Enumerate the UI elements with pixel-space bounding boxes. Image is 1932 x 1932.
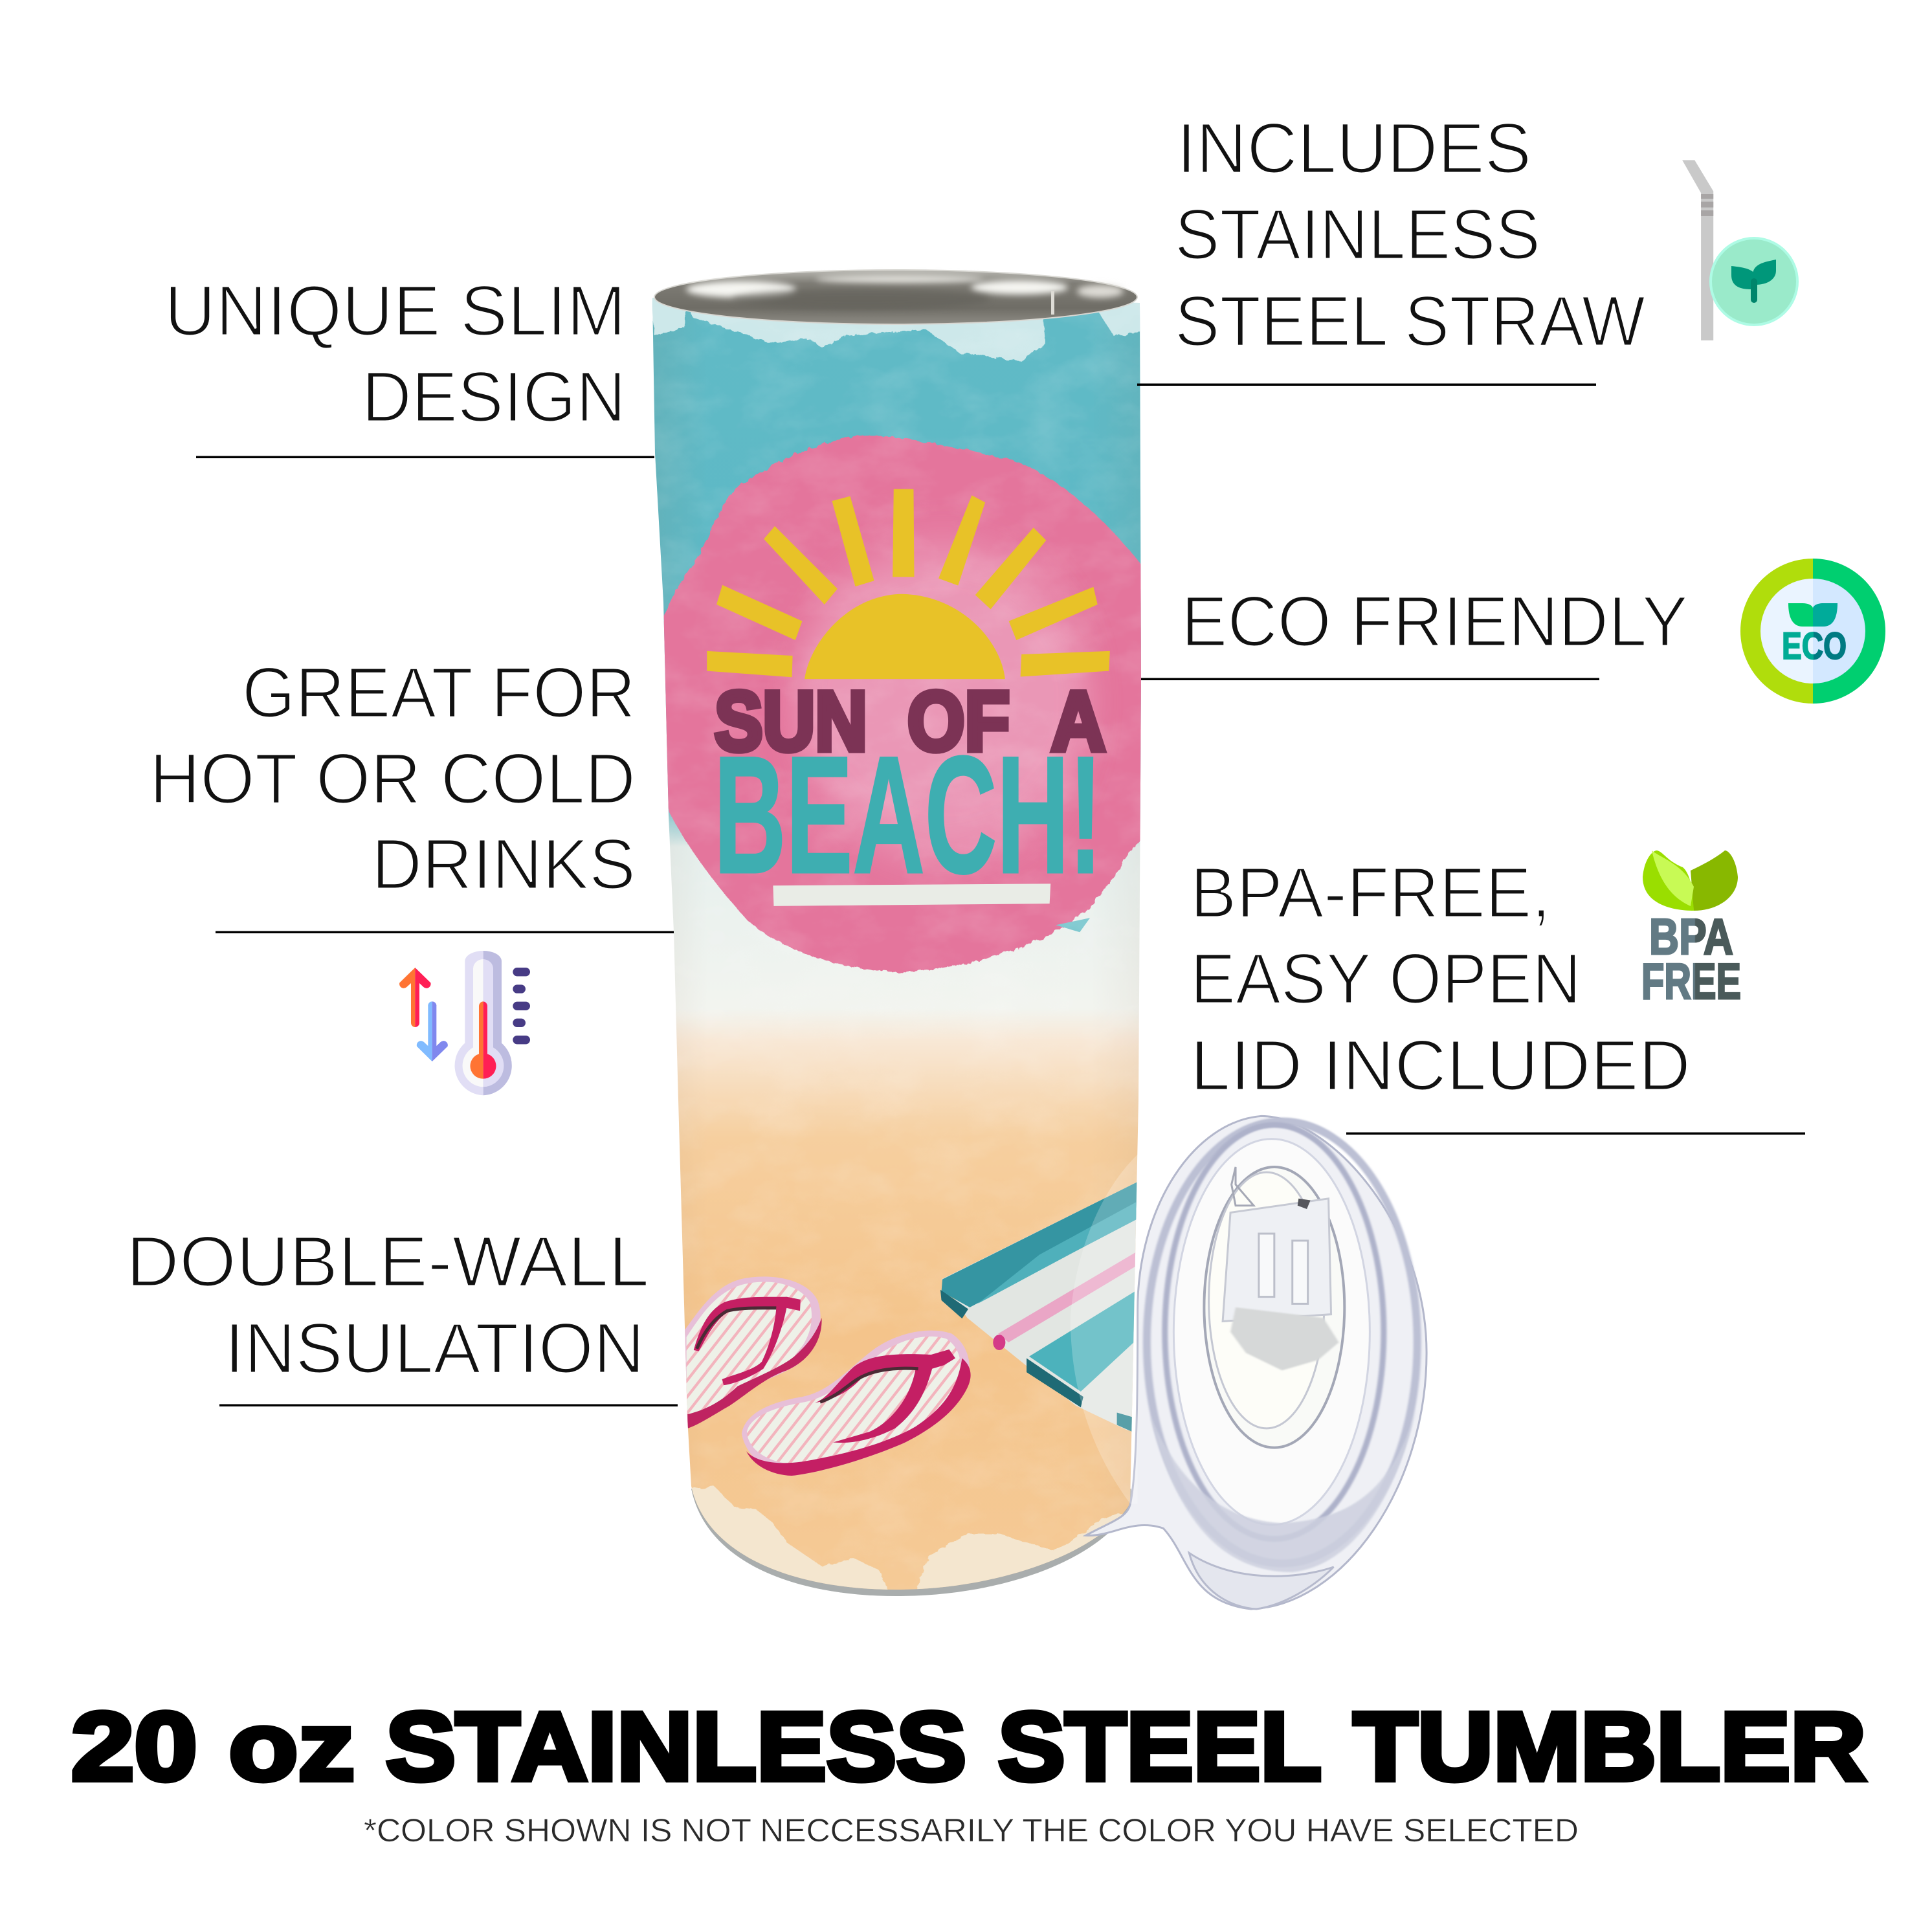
bottom clouds xyxy=(692,1485,1123,1590)
label text: INCLUDES xyxy=(1177,109,1531,188)
label text xyxy=(126,1222,649,1388)
title: TUMBLER xyxy=(1353,1692,1866,1801)
label text: DESIGN xyxy=(362,357,626,437)
icon: straw with sprout xyxy=(1682,160,1797,340)
flip-flop left xyxy=(683,1276,822,1428)
label text: GREAT FOR xyxy=(242,653,636,733)
icon: thermometer with arrows xyxy=(399,951,530,1095)
transparent lid xyxy=(1071,1116,1427,1609)
label text: EASY OPEN xyxy=(1190,939,1581,1019)
bpa text: BPA xyxy=(1649,908,1733,965)
watercolor mottling xyxy=(647,298,1152,1592)
tumbler rim xyxy=(654,270,1137,324)
leader line xyxy=(1141,678,1599,680)
feature: double-wall insulation xyxy=(126,1222,678,1406)
label text: STEEL STRAW xyxy=(1175,282,1645,361)
leader line xyxy=(196,456,654,458)
tumbler printed wrap xyxy=(647,285,1152,1599)
label text xyxy=(1190,853,1691,1105)
leader line xyxy=(216,931,674,933)
label text xyxy=(164,271,626,437)
eco text: ECO xyxy=(1782,625,1847,667)
sprout badge xyxy=(1711,238,1797,325)
footnote: *COLOR SHOWN IS NOT NECCESSARILY THE COLOR YOU HAVE SELECTED xyxy=(364,1812,1579,1849)
label text xyxy=(1175,109,1645,361)
leader line xyxy=(1137,383,1596,386)
label text: LID INCLUDED xyxy=(1190,1026,1691,1105)
design text: sun of a: A xyxy=(1051,674,1105,768)
pink sun blob xyxy=(663,436,1145,973)
title: 20 oz xyxy=(71,1692,355,1801)
icon: bpa free xyxy=(1641,850,1741,1010)
design text: sun of a: SUN xyxy=(715,674,867,768)
lid inner ovals xyxy=(1204,1167,1344,1448)
feature: bpa-free lid xyxy=(1190,853,1805,1135)
top clouds xyxy=(652,298,1140,362)
tumbler xyxy=(647,270,1152,1599)
free text: FREE xyxy=(1641,953,1741,1010)
feature: stainless steel straw xyxy=(1137,109,1645,386)
title: STAINLESS xyxy=(386,1692,966,1801)
leader line xyxy=(219,1405,678,1406)
lid outer rings xyxy=(1147,1122,1417,1564)
lid faint edge over tumbler xyxy=(1071,1135,1163,1504)
label text: HOT OR COLD xyxy=(150,739,636,819)
beach towel xyxy=(940,1179,1143,1434)
design text: sun of a xyxy=(713,689,1107,754)
feature: eco friendly xyxy=(1141,582,1688,680)
label text: STAINLESS xyxy=(1175,195,1540,274)
label text: ECO FRIENDLY xyxy=(1181,582,1688,661)
design text: sun of a: OF xyxy=(907,674,1010,768)
feature: hot or cold xyxy=(150,653,674,933)
design text: beach: BEACH! xyxy=(714,721,1102,908)
label text: BPA-FREE, xyxy=(1190,853,1551,933)
lid lower shade xyxy=(1150,1409,1416,1572)
label text xyxy=(150,653,636,904)
label text: INSULATION xyxy=(225,1309,645,1388)
title xyxy=(71,1692,1866,1801)
lid tab xyxy=(1189,1553,1334,1609)
label text: DRINKS xyxy=(372,825,636,904)
leader line xyxy=(1346,1133,1805,1135)
feature: unique slim design xyxy=(164,271,654,458)
label text: DOUBLE-WALL xyxy=(126,1222,649,1302)
tumbler bottom shadow xyxy=(691,1489,1131,1596)
icon: eco badge xyxy=(1740,559,1885,704)
label text: UNIQUE SLIM xyxy=(164,271,626,351)
lid body xyxy=(1086,1116,1427,1609)
straw xyxy=(1682,160,1713,340)
slider mechanism xyxy=(1223,1199,1331,1322)
sun rays and sun xyxy=(707,489,1110,906)
flip-flop right xyxy=(742,1331,971,1476)
title: STEEL xyxy=(998,1692,1322,1801)
